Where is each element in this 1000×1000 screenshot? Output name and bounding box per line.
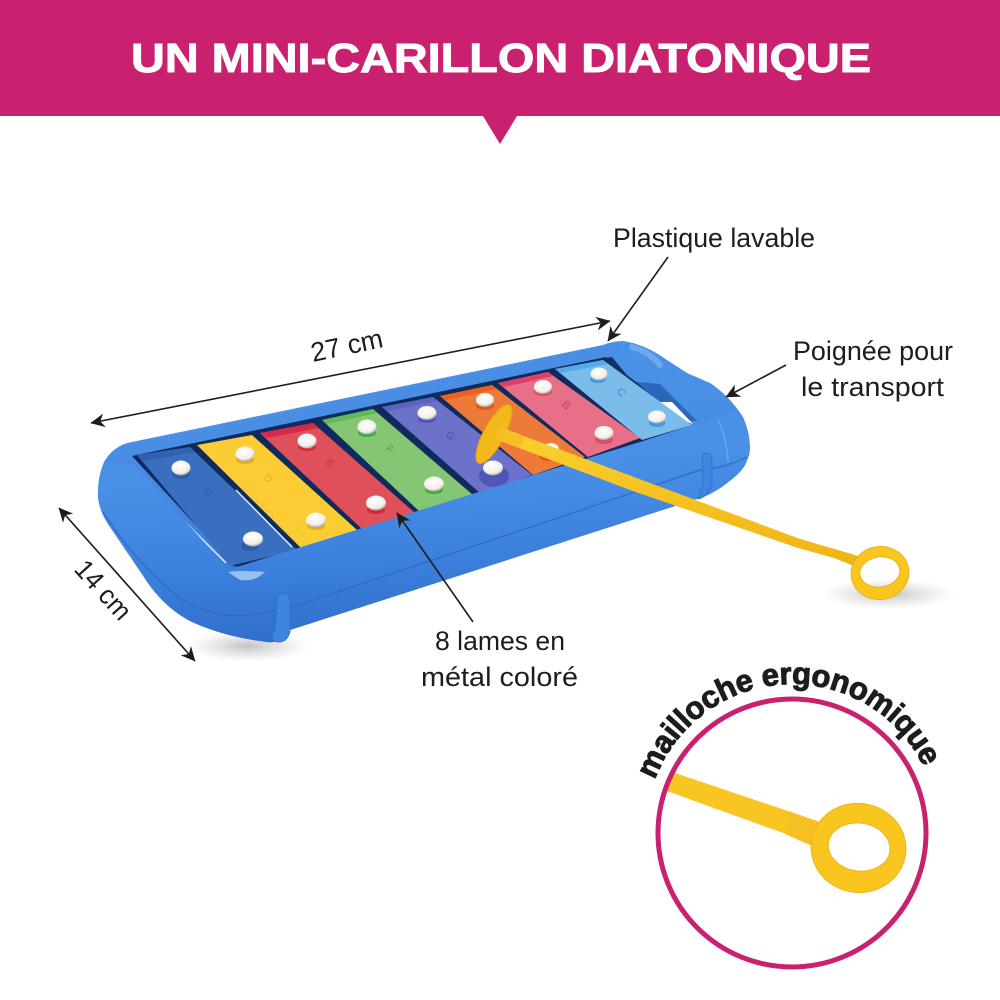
label: 8 lames en métal coloré <box>421 626 578 692</box>
bar 7 pink <box>498 372 640 457</box>
circle outline <box>658 699 926 967</box>
bar 3 red: E <box>323 457 337 470</box>
label: poignée pour le transport: Poignée pour <box>793 336 953 366</box>
bar 1 blue: C <box>201 486 215 500</box>
xylophone <box>98 341 750 642</box>
bar 4 green <box>322 409 473 512</box>
label: 8 lames en métal coloré: métal coloré <box>421 662 578 692</box>
dark well <box>132 357 692 568</box>
mallet collar <box>503 435 517 440</box>
label: 8 lames en métal coloré: 8 lames en <box>435 626 565 656</box>
bar 1 blue <box>137 447 297 566</box>
label: 14 cm: 14 cm <box>69 554 138 626</box>
title: UN MINI-CARILLON DIATONIQUE <box>131 35 871 81</box>
handle opening <box>660 402 693 424</box>
corner highlight <box>228 571 265 580</box>
bar 3 red <box>260 423 415 530</box>
enlarged ring <box>805 797 912 899</box>
top rim highlight <box>130 346 620 453</box>
header banner <box>0 0 1000 144</box>
arrow: lames <box>397 513 473 622</box>
well corner near handle <box>604 357 632 381</box>
label: plastique lavable: Plastique lavable <box>613 223 815 253</box>
enlarged collar <box>785 811 818 845</box>
rail seam <box>103 457 747 616</box>
arrow: 27 cm dimension <box>91 321 610 423</box>
handle inner shading <box>636 382 697 421</box>
bar 6 orange <box>440 385 585 475</box>
arrow: plastique lavable <box>608 257 668 341</box>
bar 5 purple <box>382 397 532 493</box>
mallet stick <box>506 431 858 566</box>
rivets <box>172 368 666 551</box>
label: 27 cm: 27 cm <box>308 323 386 368</box>
bar 8 light blue: C <box>614 386 628 400</box>
zoom circle: mallet ring <box>658 699 926 967</box>
handle highlight <box>632 347 660 365</box>
bar 7 pink: B <box>559 399 573 413</box>
front rail <box>98 410 750 642</box>
enlarged stick <box>664 772 820 846</box>
label: poignée pour le transport: le transport <box>801 372 945 402</box>
bar 5 purple: G <box>443 429 457 443</box>
arrow: 14 cm dimension <box>59 508 195 661</box>
bar 2 yellow <box>197 435 357 550</box>
bar 8 light blue <box>555 360 692 440</box>
right end cap line <box>718 419 728 462</box>
right tab <box>698 453 712 499</box>
mallet <box>469 400 912 603</box>
mallet head <box>469 400 519 468</box>
bar 2 yellow: D <box>261 472 275 486</box>
plastic frame body <box>98 341 750 642</box>
label: poignée pour le transport <box>793 336 953 402</box>
arrow: poignée <box>726 365 786 397</box>
mallet ring <box>848 543 912 603</box>
curved heading: mailloche ergonomique <box>640 666 936 779</box>
bar 4 green: F <box>383 443 396 456</box>
front tab <box>272 593 290 642</box>
ground shadows <box>186 579 956 662</box>
